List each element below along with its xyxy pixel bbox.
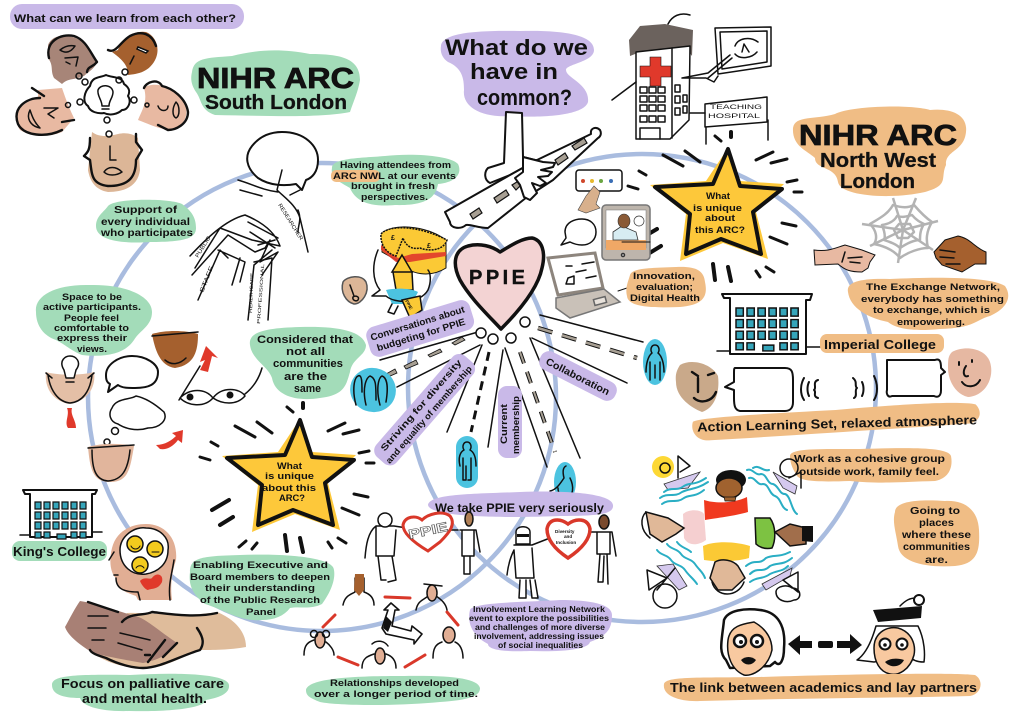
star: what is unique, South London: ARC? (279, 493, 305, 504)
icon: thought cloud (110, 396, 165, 430)
callout: enabling executive and board members: Board members to deepen (190, 572, 330, 583)
icon: keypad (576, 170, 622, 213)
label: current membership: Current (499, 404, 509, 444)
icon: sun (652, 456, 674, 478)
icon: heart diversity and inclusion (547, 520, 590, 558)
label: conversations about budgeting (364, 298, 476, 359)
heart: PPIE: PPIE (469, 267, 525, 289)
icon: empty speech bubble (106, 356, 158, 392)
icon: person on blue (456, 436, 478, 488)
title: NIHR ARC North West London: London (840, 171, 915, 193)
icon: puzzle ends of roads (476, 317, 530, 344)
callout: involvement learning network: Involvement Learning Network (473, 604, 605, 614)
callout: the exchange network: everybody has something (861, 294, 1004, 305)
label: Imperial College (820, 334, 944, 353)
callout: going to places: places (919, 517, 954, 529)
arms behind road (485, 112, 543, 183)
waves: bottom right boat (746, 552, 800, 602)
person: red shirt (704, 470, 748, 520)
icon: person left (365, 526, 420, 582)
icon: head with light bulb (46, 356, 94, 404)
illustration: money cake (372, 227, 447, 320)
label: the link between academics and lay partners: The link between academics and lay partners (670, 680, 977, 695)
icon: right speech bubble (887, 359, 945, 397)
callout: involvement learning network: and challenges of more diverse (475, 622, 605, 632)
callout: considered that not all communities: same (294, 383, 321, 395)
speech bubble with hands (190, 132, 318, 324)
callout: enabling executive and board members: of the Public Research (200, 595, 320, 606)
icon: glasses (179, 366, 262, 405)
person: left with glasses (304, 630, 334, 655)
callout: focus on palliative care: and mental health. (82, 692, 207, 706)
label: King's College (12, 541, 107, 561)
road: to wheelchair user (505, 338, 580, 467)
title: NIHR ARC South London (191, 50, 360, 116)
icon: heart diversity and inclusion: Inclusion (556, 540, 576, 545)
callout: innovation, digital health (626, 267, 706, 307)
illustration: digital health devices (548, 170, 650, 318)
callout: involvement learning network: of social inequalities (498, 640, 583, 650)
star: what is unique, North West London: this ARC? (695, 225, 745, 236)
icon: man (586, 532, 616, 584)
hand gripping road (515, 157, 555, 200)
icon: pink face (948, 348, 991, 397)
callout: considered that not all communities: Considered that (257, 334, 353, 346)
waves: top left boat (660, 456, 708, 504)
label: PPIE tag: PPIE (404, 299, 414, 310)
callout: support of every individual: every individual (101, 217, 190, 228)
arrow: red top (200, 346, 218, 372)
callout: the exchange network (848, 278, 1008, 330)
illustration: money cake: £ (391, 235, 395, 242)
road: to single person (447, 345, 503, 447)
callout: enabling executive and board members: Enabling Executive and (193, 560, 328, 571)
callout: enabling executive and board members (190, 555, 334, 620)
waves: top right boat (747, 459, 801, 514)
icon: brown smiling head (152, 331, 198, 368)
heading: what do we have in common (441, 31, 594, 117)
label: public: PUBLIC (195, 236, 212, 259)
red dashes (323, 597, 458, 667)
icon: wheelchair user on blue (550, 462, 576, 502)
label: current membership: membership (511, 395, 521, 454)
ring: North West London circle (408, 154, 876, 622)
callout: going to places: are. (925, 554, 948, 566)
star: what is unique, South London: What (277, 461, 303, 472)
title: NIHR ARC North West London: North West (820, 150, 936, 172)
callout: involvement learning network: involvement, addressing issues (474, 631, 604, 641)
callout: relationships developed: over a longer period of time. (314, 689, 478, 700)
icon: person right (448, 530, 480, 574)
star: what is unique, North West London (628, 132, 802, 281)
illustration: clasped hands (65, 601, 246, 668)
icon: surprised head (342, 277, 367, 304)
callout: going to places: where these (901, 529, 971, 541)
callout: having attendees: perspectives. (361, 192, 428, 203)
heading: what do we have in common: have in (470, 59, 558, 84)
callout: space to be active participants: active participants. (43, 302, 141, 313)
label: collaboration (536, 348, 620, 404)
illustration: money cake: £ (427, 243, 431, 250)
illustration: head with emotions (109, 524, 176, 600)
icon: whiteboard (715, 27, 771, 74)
illustration: five heads sharing an idea (16, 32, 188, 192)
icon: heart with PPIE: PPIE (407, 519, 450, 542)
icon: left pink head (16, 88, 74, 136)
icon: right pink head (138, 82, 188, 130)
icon: laptop (548, 253, 620, 318)
callout: considered that not all communities: not all (286, 346, 325, 358)
label: King's College: King's College (13, 545, 106, 559)
label: action learning set (692, 402, 980, 441)
heading: what can we learn (10, 4, 244, 29)
star: what is unique, North West London: is unique (693, 203, 742, 214)
callout: having attendees (331, 155, 459, 206)
label: researcher: RESEARCHER (276, 203, 304, 242)
callout: enabling executive and board members: their understanding (205, 583, 315, 594)
illustration: two people holding PPIE heart (365, 512, 480, 582)
illustration: two people holding Diversity heart (507, 515, 616, 598)
ring: South London circle (88, 163, 556, 631)
callout: the exchange network: empowering. (897, 317, 965, 328)
icon: speech bubble (561, 219, 596, 245)
icon: academic woman (721, 609, 784, 675)
callout: we take PPIE very seriously: We take PPIE very seriously (435, 501, 604, 515)
star: what is unique, North West London: about (705, 213, 736, 224)
icon: brown head (108, 32, 158, 75)
label: healthcare: HEALTHCARE (248, 273, 254, 313)
callout: having attendees: brought in fresh (351, 181, 435, 192)
person: brown (343, 574, 374, 605)
callout: considered that not all communities: communities (273, 358, 343, 370)
callout: relationships developed (306, 676, 480, 705)
illustration: spider web and reaching hands (814, 198, 986, 272)
star: what is unique, North West London: What (706, 191, 731, 202)
arrow: double headed dashed (788, 634, 862, 655)
label: Imperial College: Imperial College (824, 338, 936, 352)
heading: what can we learn: What can we learn from each other? (14, 13, 236, 25)
heading: what do we have in common: What do we (445, 35, 588, 60)
label: the link between academics and lay partners (664, 674, 981, 701)
label: current membership (498, 386, 522, 458)
callout: work as a cohesive group: Work as a cohesive group (794, 453, 945, 465)
label: conversations about budgeting: Conversations about (369, 304, 467, 344)
callout: innovation, digital health: evaluation; (636, 282, 693, 293)
callout: going to places: Going to (910, 505, 960, 517)
callout: involvement learning network: event to explore the possibilities (469, 613, 609, 623)
heart: PPIE (455, 238, 544, 329)
icon: person in apron (507, 538, 550, 598)
waves: bottom left boat (647, 542, 705, 608)
callout: the exchange network: The Exchange Network, (866, 282, 1000, 293)
callout: work as a cohesive group (790, 448, 952, 483)
label: collaboration: Collaboration (544, 357, 611, 398)
callout: going to places (894, 500, 979, 566)
icon: tablet with doctor (602, 205, 650, 260)
callout: going to places: communities (903, 541, 970, 553)
label: striving for diversity (370, 350, 479, 469)
icon: taupe head (48, 35, 97, 84)
icon: Imperial College building (717, 294, 820, 354)
callout: focus on palliative care (52, 674, 229, 711)
icon: heart diversity and inclusion: and (564, 534, 572, 539)
callout: enabling executive and board members: Panel (246, 607, 276, 618)
icon: lay partner woman (857, 595, 924, 674)
illustration: action learning conversation (676, 348, 991, 412)
icon: pink hand (814, 245, 875, 272)
person: top right (416, 584, 447, 610)
icon: heart diversity and inclusion: Diversity (555, 529, 575, 534)
title: NIHR ARC South London: NIHR ARC (197, 63, 354, 95)
label: conversations about budgeting: budgeting for PPIE (376, 317, 467, 354)
callout: having attendees: Having attendees from (340, 160, 451, 171)
callout: space to be active participants: express their (57, 333, 127, 344)
icon: web (862, 198, 938, 263)
road: left, to groups (380, 332, 480, 387)
callout: involvement learning network (469, 600, 612, 651)
callout: space to be active participants: views. (77, 344, 107, 355)
label: striving for diversity: Striving for diversity (379, 358, 464, 453)
icon: bottom tan head (84, 132, 142, 192)
callout: relationships developed: Relationships developed (330, 678, 459, 689)
illustration: academic and lay partner (721, 595, 924, 675)
callout: innovation, digital health: Innovation, (633, 271, 695, 282)
icon: brown hand (934, 236, 986, 272)
heading: what do we have in common: common? (477, 85, 572, 110)
sign: teaching hospital (690, 97, 768, 144)
title: NIHR ARC North West London (793, 107, 966, 196)
icon: group of people on blue (344, 361, 402, 419)
title: NIHR ARC South London: South London (205, 92, 347, 114)
callout: space to be active participants: comfortable to (54, 323, 129, 334)
arrows: centre right-angle (382, 603, 422, 644)
callout: support of every individual: who participates (100, 228, 194, 239)
callout: space to be active participants (36, 285, 152, 356)
label: striving for diversity: and equality of membership (384, 363, 474, 466)
label: staff: STAFF (199, 265, 216, 294)
road: connecting the two ARCs (445, 128, 601, 228)
star: what is unique, South London: is unique (265, 471, 314, 482)
callout: support of every individual: Support of (114, 205, 178, 216)
callout: we take PPIE very seriously (428, 492, 613, 517)
icon: tan face (676, 362, 718, 412)
arrow: red down (67, 408, 76, 428)
illustration: group around table (642, 456, 813, 608)
illustration: teaching hospital (612, 14, 771, 139)
illustration: exchange of ideas (46, 331, 262, 482)
callout: considered that not all communities (250, 327, 366, 399)
title: NIHR ARC North West London: NIHR ARC (799, 120, 957, 152)
road: to right person (532, 315, 643, 383)
person: right (433, 627, 463, 658)
person: bottom (362, 641, 396, 668)
label: action learning set: Action Learning Set, relaxed atmosphere (697, 412, 977, 435)
person: green shirt (755, 518, 813, 549)
callout: space to be active participants: Space to be (62, 292, 122, 303)
callout: innovation, digital health: Digital Health (630, 293, 700, 304)
callout: considered that not all communities: are the (284, 371, 327, 383)
sign: teaching hospital: TEACHING (710, 104, 762, 111)
callout: space to be active participants: People feel (64, 313, 119, 324)
person: yellow shirt (703, 542, 750, 594)
icon: King's College building (20, 490, 102, 539)
star: what is unique, South London: about this (262, 483, 316, 494)
callout: work as a cohesive group: outside work, family feel. (799, 466, 939, 478)
person: pink shirt (642, 510, 706, 544)
icon: left speech bubble (725, 368, 793, 411)
icon: person on blue right (643, 339, 667, 385)
illustration: circle of people (304, 574, 463, 668)
star: what is unique, South London (200, 403, 374, 552)
callout: focus on palliative care: Focus on palliative care (61, 677, 224, 691)
icon: thought cloud with light bulb (66, 69, 149, 137)
callout: support of every individual (96, 200, 196, 242)
arrow: red up-right (156, 430, 183, 449)
illustration: arms holding road (445, 112, 601, 228)
sign: teaching hospital: HOSPITAL (708, 113, 761, 120)
callout: having attendees: ARC NWL at our events (333, 171, 456, 182)
label: professional: PROFESSIONAL (256, 263, 265, 324)
icon: tan head below (88, 444, 134, 482)
callout: the exchange network: to exchange, which is (873, 305, 990, 316)
